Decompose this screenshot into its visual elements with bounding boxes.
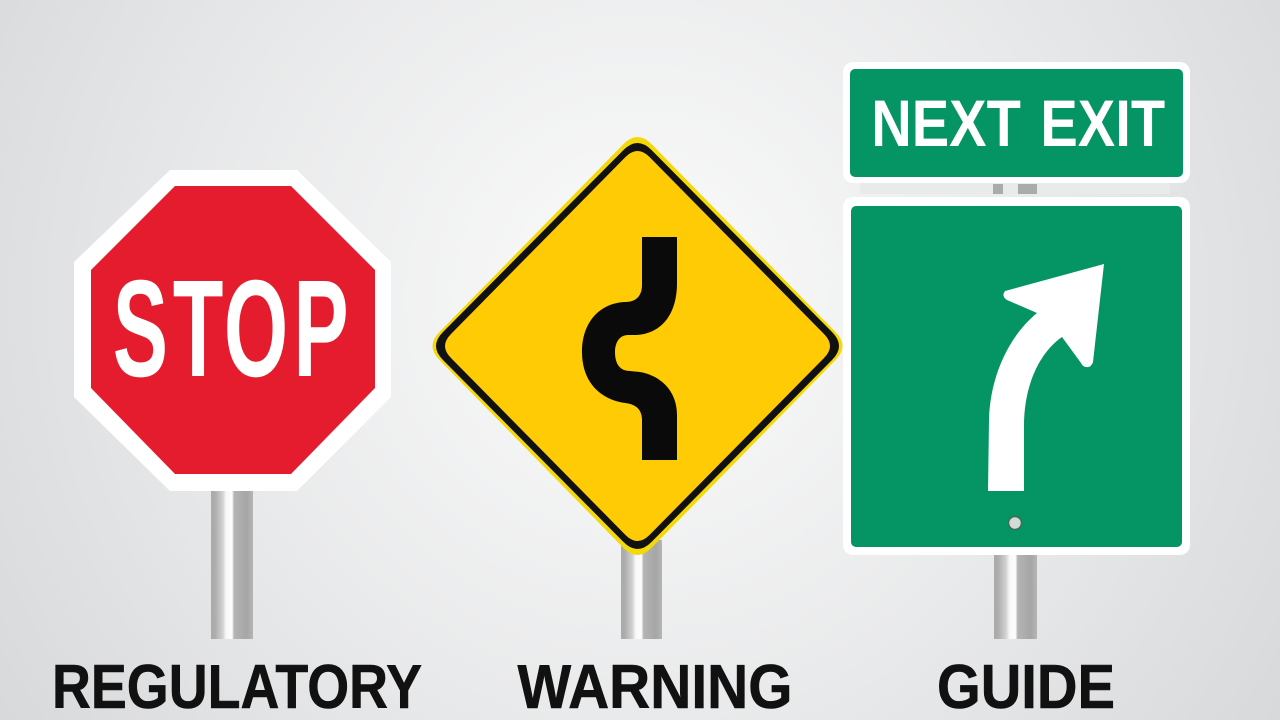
next exit text: EXIT	[1040, 87, 1165, 160]
guide sign group	[843, 62, 1190, 639]
next exit text: NEXT	[871, 87, 1021, 160]
stop sign group	[74, 170, 391, 639]
pole: warning	[621, 540, 662, 639]
stop text: STOP	[113, 252, 349, 406]
warning sign group	[432, 137, 842, 639]
pole: guide	[994, 550, 1037, 639]
label: warning: WARNING	[518, 653, 792, 720]
icon: warning diamond	[432, 137, 842, 555]
icon: winding road	[582, 237, 677, 460]
label: guide: GUIDE	[937, 653, 1115, 720]
panel: next exit	[843, 62, 1190, 183]
pole: stop	[211, 485, 253, 639]
connector between guide panels	[860, 183, 1170, 194]
panel: exit arrow	[843, 197, 1190, 555]
icon: bolt	[1008, 516, 1022, 530]
icon: curved arrow	[988, 264, 1104, 491]
label: regulatory: REGULATORY	[52, 653, 422, 720]
icon: stop octagon	[74, 170, 391, 491]
